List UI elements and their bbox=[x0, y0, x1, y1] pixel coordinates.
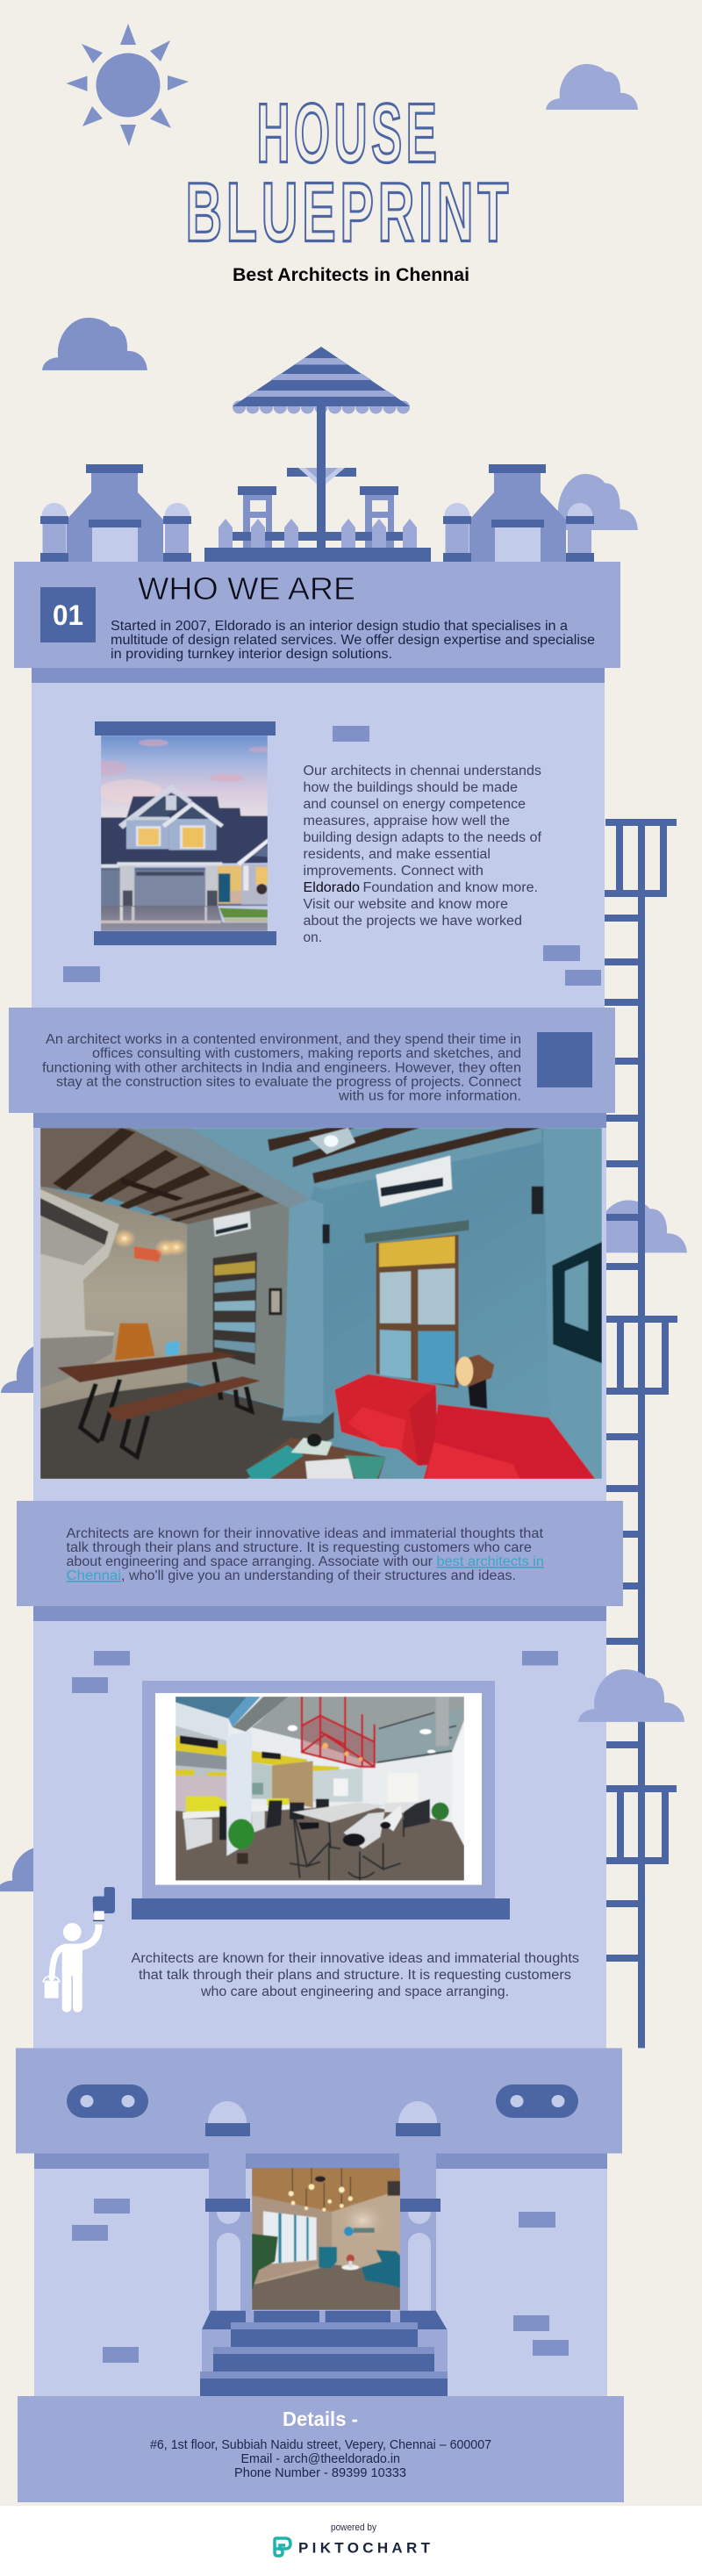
number badge 01: 01 bbox=[53, 599, 83, 631]
text: architects are known: who care about engineering and space arranging. bbox=[200, 1984, 509, 1999]
contact lines: Email - arch@theeldorado.in bbox=[240, 2451, 400, 2466]
entrance steps bbox=[200, 2311, 448, 2396]
icon: painter with bucket and roller bbox=[43, 1887, 115, 2013]
panel: architects innovative ideas: , who'll give you an understanding of their structures and ideas. bbox=[121, 1568, 516, 1583]
fire escape ladder bbox=[604, 819, 677, 2049]
panel: who we are header bbox=[14, 562, 620, 668]
intro text: Started in 2007, Eldorado is an interior design studio that specialises in a bbox=[111, 619, 568, 634]
title: BLUEPRINT bbox=[186, 164, 512, 259]
panel: architect environment: offices consulting with customers, making reports and sketches, and bbox=[92, 1046, 521, 1061]
photo: house at dusk in window frame bbox=[92, 721, 276, 945]
panel: architect environment: with us for more information. bbox=[338, 1088, 521, 1104]
panel: ground floor wall bbox=[34, 2154, 607, 2396]
heading: who we are: WHO WE ARE bbox=[138, 570, 355, 606]
photo: office with red armchairs bbox=[40, 1128, 602, 1479]
text: our architects: how the buildings should be made bbox=[304, 780, 518, 795]
intro text: multitude of design related services. We offer design expertise and specialise bbox=[111, 633, 595, 648]
footer: powered by piktochart bbox=[275, 2522, 431, 2556]
entrance porch columns bbox=[205, 2123, 441, 2311]
right chimney tower bbox=[443, 464, 594, 562]
text: our architects: Eldorado bbox=[304, 880, 360, 895]
intro text: in providing turnkey interior design solutions. bbox=[111, 647, 392, 662]
icon: cloud lower left behind building bbox=[0, 1847, 102, 1891]
text: our architects: about the projects we have worked bbox=[304, 914, 522, 929]
panel: architects innovative ideas: best architects in bbox=[437, 1554, 544, 1569]
icon: cloud left bbox=[42, 318, 147, 370]
subtitle: Best Architects in Chennai bbox=[233, 265, 469, 285]
text: our architects: and counsel on energy competence bbox=[304, 797, 526, 812]
panel: contact details bbox=[18, 2396, 624, 2502]
icon: cloud left behind building bbox=[1, 1343, 106, 1393]
panel: roof bbox=[16, 2049, 622, 2154]
text: architects are known: that talk through their plans and structure. It is requesting customers bbox=[139, 1968, 571, 1983]
title bbox=[186, 87, 512, 259]
left chimney tower bbox=[40, 464, 191, 562]
photo: open office in window frame bbox=[132, 1681, 510, 1919]
footer band bbox=[0, 2506, 702, 2576]
icon: cloud behind ladder bbox=[582, 1201, 687, 1252]
rooftop umbrella and fence bbox=[204, 347, 431, 562]
text: our architects: improvements. Connect with bbox=[304, 864, 484, 879]
panel: architects innovative ideas bbox=[17, 1501, 623, 1621]
panel: architects innovative ideas: about engineering and space arranging. Associate with our bbox=[67, 1554, 433, 1569]
panel: architect environment bbox=[9, 1008, 615, 1128]
contact lines: #6, 1st floor, Subbiah Naidu street, Vepery, Chennai – 600007 bbox=[150, 2437, 491, 2452]
icon: piktochart logo bbox=[275, 2538, 290, 2556]
intro text bbox=[111, 619, 595, 662]
text: our architects: Foundation and know more. bbox=[363, 880, 538, 895]
icon: sun bbox=[67, 24, 189, 146]
text: our architects: building design adapts to the needs of bbox=[304, 830, 542, 845]
icon: cloud over ladder bbox=[578, 1669, 684, 1722]
text: our architects bbox=[304, 764, 542, 945]
panel: architect environment: An architect works in a contented environment, and they spend their time in bbox=[46, 1032, 521, 1047]
footer: powered by piktochart: powered by bbox=[331, 2522, 376, 2533]
panel: architects innovative ideas: Architects are known for their innovative ideas and immaterial thoughts that bbox=[67, 1526, 544, 1541]
panel: lower wall bbox=[33, 1621, 606, 2049]
text: our architects: Visit our website and know more bbox=[304, 897, 508, 912]
text: our architects: Our architects in chennai understands bbox=[304, 764, 541, 779]
text: our architects: residents, and make essential bbox=[304, 847, 491, 862]
panel: architects innovative ideas: Chennai bbox=[67, 1568, 121, 1583]
icon: left roof vent bbox=[67, 2084, 148, 2118]
number badge 01 bbox=[40, 587, 96, 642]
text: our architects: on. bbox=[304, 930, 322, 945]
text: our architects: measures, appraise how well the bbox=[304, 814, 510, 829]
panel: architect environment: functioning with other architects in India and engineers. However, they often bbox=[42, 1060, 521, 1076]
contact lines bbox=[150, 2437, 491, 2480]
contact lines: Phone Number - 89399 10333 bbox=[234, 2465, 406, 2480]
icon: cloud top right bbox=[546, 64, 638, 110]
text: architects are known bbox=[132, 1951, 579, 1999]
heading: details: Details - bbox=[283, 2407, 358, 2430]
icon: right roof vent bbox=[496, 2084, 578, 2118]
footer: powered by piktochart: PIKTOCHART bbox=[298, 2540, 431, 2556]
icon: cloud behind tower bbox=[544, 474, 638, 530]
wall behind office photo bbox=[33, 1128, 606, 1501]
panel: architects innovative ideas: talk through their plans and structure. It is requesting customers who care bbox=[67, 1540, 532, 1555]
photo: reception lobby bbox=[252, 2168, 400, 2310]
panel: who we are wall bbox=[32, 668, 605, 1008]
title: HOUSE bbox=[256, 87, 441, 181]
text: architects are known: Architects are known for their innovative ideas and immaterial thoughts bbox=[132, 1951, 579, 1966]
panel: architect environment: stay at the construction sites to evaluate the progress of projects. Connect bbox=[56, 1074, 522, 1090]
